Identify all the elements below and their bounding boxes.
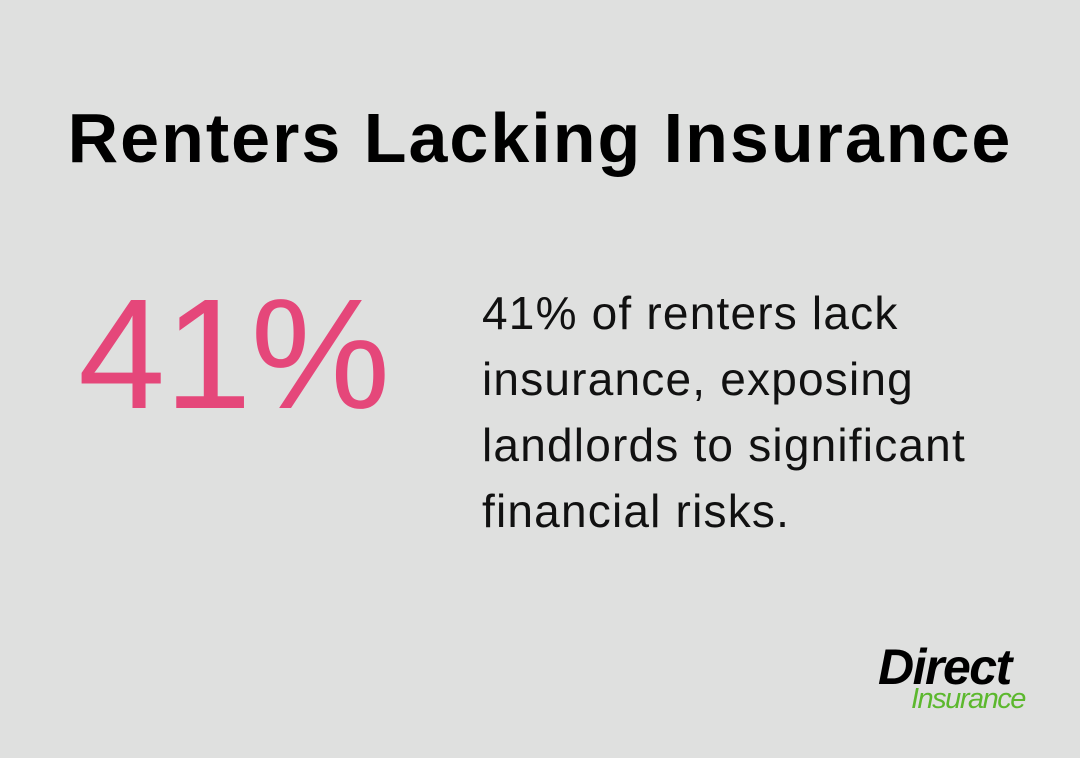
logo: Direct Insurance: Insurance — [911, 683, 1025, 715]
description text: 41% of renters lack — [482, 287, 899, 339]
logo: Direct Insurance — [878, 639, 1026, 715]
description text: financial risks. — [482, 485, 790, 537]
description text: insurance, exposing — [482, 353, 914, 405]
title: Renters Lacking Insurance — [68, 99, 1012, 177]
logo: Direct Insurance: Direct — [878, 639, 1011, 695]
description text: landlords to significant — [482, 419, 966, 471]
big statistic: 41% — [78, 267, 389, 442]
description text — [482, 287, 966, 537]
